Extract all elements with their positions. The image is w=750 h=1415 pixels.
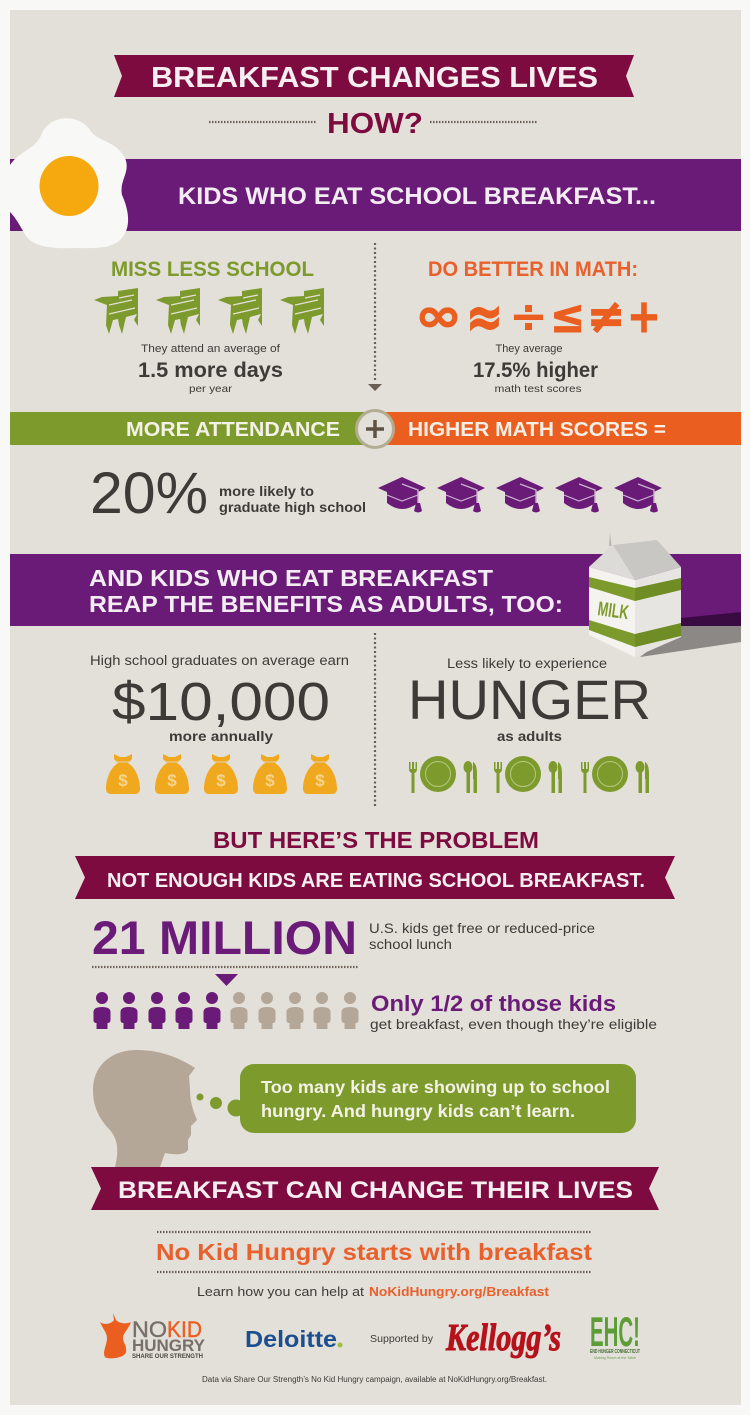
icons: money bags: $ (265, 771, 275, 790)
icons: school desks (94, 288, 324, 334)
logo: kelloggs: Kellogg’s (445, 1317, 561, 1359)
panel: miss less school (94, 258, 324, 395)
stat: 20 percent: more likely to (219, 484, 314, 499)
text: earnings: $10,000 (112, 672, 330, 732)
heading: miss less school: MISS LESS SCHOOL (111, 258, 314, 281)
call to action: No Kid Hungry starts with breakfast (156, 1239, 592, 1265)
icons: people (94, 992, 358, 1029)
logo: no kid hungry (100, 1313, 206, 1360)
text: learn how (197, 1285, 550, 1299)
logo: deloitte: Deloitte (245, 1326, 337, 1352)
logo: no kid hungry: NO (132, 1317, 167, 1342)
stat: 20 percent: graduate high school (219, 500, 366, 515)
banner: not enough kids: NOT ENOUGH KIDS ARE EATING SCHOOL BREAKFAST. (107, 870, 645, 892)
icons: math symbols: ≈ (466, 285, 503, 350)
purple heading band (10, 159, 741, 231)
stat: 20 percent: 20% (90, 461, 208, 526)
heading: the problem: BUT HERE’S THE PROBLEM (213, 827, 539, 853)
stat: math scores: math test scores (494, 383, 582, 395)
logo: ehc: Making Room at the Table (594, 1355, 637, 1360)
stat: 21 million: school lunch (369, 937, 452, 952)
stat: 21 million: U.S. kids get free or reduced-price (369, 921, 595, 936)
icons: math symbols: ∞ (415, 288, 462, 342)
title banner: BREAKFAST CHANGES LIVES (151, 62, 598, 94)
stat: math scores: They average (496, 343, 562, 355)
banner: breakfast can change their lives (91, 1167, 659, 1210)
text: earnings (90, 653, 349, 744)
icons: math symbols (415, 285, 661, 350)
purple heading band: adults (10, 554, 741, 626)
subheading: how: HOW? (327, 108, 423, 140)
text: supported by: Supported by (370, 1333, 434, 1345)
icons: money bags: $ (167, 771, 177, 790)
logo: no kid hungry: SHARE OUR STRENGTH (132, 1353, 203, 1360)
stat: 21 million (92, 911, 595, 964)
stat: 21 million: 21 MILLION (92, 911, 357, 964)
icons: graduation caps (378, 477, 662, 512)
banner: breakfast can change their lives: BREAKFAST CAN CHANGE THEIR LIVES (118, 1177, 633, 1204)
infographic page: EHC! (590, 1308, 640, 1355)
text: only half: get breakfast, even though they’re eligible (370, 1017, 657, 1032)
callout: thought bubble (196, 1064, 636, 1133)
logo: ehc: END HUNGER CONNECTICUT (590, 1349, 640, 1355)
text: hunger: HUNGER (408, 668, 651, 731)
text: learn how: NoKidHungry.org/Breakfast (369, 1285, 550, 1299)
stat: attendance: They attend an average of (141, 343, 281, 355)
text: only half: Only 1/2 of those kids (371, 991, 616, 1016)
stat: 20 percent (90, 461, 366, 526)
panel: earnings (90, 653, 349, 794)
icons: math symbols: + (627, 289, 661, 343)
dotted pointer (92, 967, 358, 986)
icon: plus circle (356, 410, 394, 448)
text: earnings: High school graduates on average earn (90, 653, 349, 668)
logo: ehc (590, 1308, 640, 1360)
icons: money bags (106, 754, 337, 794)
icon: milk carton (589, 532, 741, 657)
logo: no kid hungry: KID (167, 1317, 202, 1342)
text: data source: Data via Share Our Strength’s No Kid Hungry campaign, available at NoKidHungry.org/Breakfast. (202, 1375, 547, 1384)
icons: math symbols: ≤ (550, 289, 585, 343)
icons: money bags: $ (216, 771, 226, 790)
icons: money bags: $ (118, 771, 128, 790)
stat: attendance: 1.5 more days (138, 359, 283, 382)
purple heading band: adults: AND KIDS WHO EAT BREAKFAST (89, 565, 493, 591)
text: earnings: more annually (169, 729, 274, 744)
equation bar (10, 410, 741, 448)
stat: math scores: 17.5% higher (473, 359, 598, 382)
icon: fried egg (10, 118, 128, 248)
icons: plate settings (409, 756, 649, 793)
stat: math scores (473, 343, 598, 395)
icons: math symbols: ≠ (587, 289, 625, 343)
banner: not enough kids (75, 856, 675, 899)
stat: attendance (138, 343, 283, 395)
panel: hunger (408, 656, 651, 793)
panel: do better in math (415, 258, 661, 395)
equation bar: MORE ATTENDANCE (126, 419, 340, 441)
dotted divider: adults (374, 633, 376, 806)
stat: attendance: per year (189, 383, 233, 395)
logo: no kid hungry: HUNGRY (132, 1336, 206, 1355)
equation bar: HIGHER MATH SCORES = (408, 419, 666, 441)
purple heading band: adults: REAP THE BENEFITS AS ADULTS, TOO: (89, 591, 563, 617)
text: hunger: as adults (497, 729, 562, 744)
callout: thought bubble: hungry. And hungry kids can’t learn. (261, 1101, 575, 1121)
dotted arrow: top divider (368, 243, 382, 391)
purple heading band: KIDS WHO EAT SCHOOL BREAKFAST... (178, 183, 656, 210)
icons: money bags: $ (315, 771, 325, 790)
icon: child head (93, 1050, 197, 1167)
text: hunger: Less likely to experience (447, 656, 607, 671)
icons: math symbols: ÷ (509, 289, 548, 343)
callout: thought bubble: Too many kids are showing up to school (261, 1077, 610, 1097)
text: only half (370, 991, 657, 1032)
title banner (114, 55, 634, 97)
text: learn how: Learn how you can help at (197, 1285, 365, 1299)
heading: do better in math: DO BETTER IN MATH: (428, 258, 638, 281)
icon: milk carton: MILK (596, 598, 630, 624)
